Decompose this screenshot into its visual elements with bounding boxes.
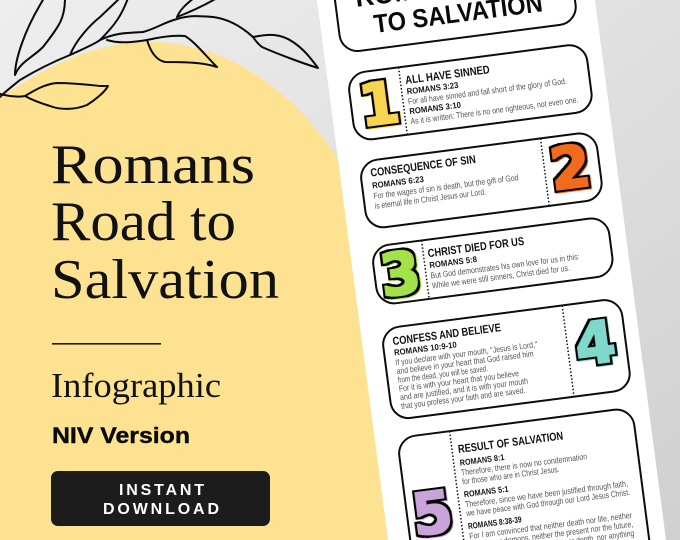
card 4 text: For it is with your heart that you believe (398, 368, 520, 394)
card 4 text: ROMANS 10:9-10 (393, 339, 457, 357)
card 5 text: Therefore, there is now no condemnation (460, 451, 588, 478)
card 3: christ died for us (371, 213, 615, 311)
number 3: 3 (376, 238, 425, 310)
card 5 text: RESULT OF SALVATION (457, 430, 564, 456)
download button (51, 471, 270, 526)
infographic paper sheet (317, 0, 666, 540)
leaf branch line art (0, 0, 318, 109)
card 5 text: ROMANS 8:1 (459, 452, 505, 468)
card 4 text: If you declare with your mouth, "Jesus is Lord," (395, 339, 538, 367)
number 1: 1 (355, 68, 404, 140)
card 2: consequence of sin (359, 130, 604, 229)
card 4 text (392, 318, 544, 411)
card 4 text: and are justified, and it is with your mouth (399, 376, 529, 402)
card 5 text: we have peace with God through our Lord Jesus Christ. (465, 487, 631, 518)
number 4: 4 (571, 307, 620, 379)
card 5 text: Therefore, since we have been justified through faith, (464, 478, 628, 509)
download button: INSTANT (119, 482, 204, 499)
card 1 text: ROMANS 3:23 (406, 80, 459, 96)
title card (329, 0, 578, 53)
subtitle: Infographic: Infographic (51, 366, 221, 405)
divider rule (52, 343, 161, 345)
card 5: result of salvation (397, 407, 654, 540)
card 1 text: ROMANS 3:10 (409, 100, 462, 116)
card 4: confess and believe (381, 298, 632, 420)
card 4 text: from the dead, you will be saved. (397, 363, 489, 385)
card 4 text: that you profess your faith and are saved. (400, 385, 526, 411)
card 1 text: As it is written: There is no one righteous, not even one. (410, 94, 579, 126)
card 5 text: ROMANS 8:38-39 (467, 514, 522, 531)
number 2: 2 (546, 132, 595, 204)
card 1 text (405, 53, 579, 126)
card 1 text: ALL HAVE SINNED (405, 64, 490, 87)
card 3 text: While we were still sinners, Christ died for us. (431, 263, 570, 290)
card 2 text (370, 149, 520, 211)
card 2 text: ROMANS 6:23 (371, 174, 425, 190)
main title (51, 134, 279, 311)
card 1 text: For all have sinned and fall short of the glory of God. (407, 76, 567, 106)
card 1: all have sinned (347, 43, 594, 141)
card 5 text: For I am convinced that neither death nor life, neither (469, 510, 633, 540)
card 2 text: CONSEQUENCE OF SIN (370, 154, 476, 180)
card 3 text: But God demonstrates his own love for us in this: (430, 251, 580, 281)
card 3 text (427, 229, 581, 290)
card 4 text: and believe in your heart that God raised him (396, 348, 534, 376)
card 4 text: CONFESS AND BELIEVE (392, 322, 502, 348)
version label: NIV Version (52, 423, 190, 448)
card 2 text: For the wages of sin is death, but the gift of God (373, 172, 519, 201)
card 3 text: ROMANS 5:8 (429, 254, 478, 270)
card 5 text (457, 423, 636, 540)
download button: DOWNLOAD (103, 501, 219, 518)
main title: Salvation (51, 249, 279, 311)
card 3 text: CHRIST DIED FOR US (427, 236, 525, 260)
main title: Romans (51, 134, 255, 196)
yellow arch shape (0, 42, 400, 540)
card 2 text: is eternal life in Christ Jesus our Lord. (374, 186, 486, 211)
main title: Road to (51, 191, 236, 253)
card 5 text: ROMANS 5:1 (463, 484, 509, 499)
card 5 text: for those who are in Christ Jesus. (461, 464, 560, 486)
